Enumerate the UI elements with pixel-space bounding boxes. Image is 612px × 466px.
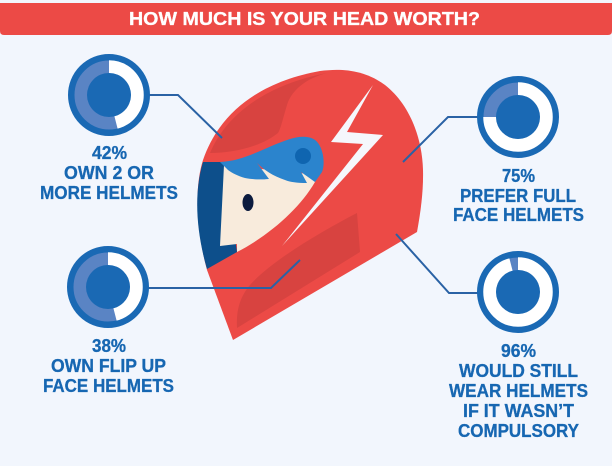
stat: 96% would still wear helmets: IF IT WASN’T [463, 401, 574, 421]
donut chart 96% [480, 254, 556, 330]
connector: bottom left [130, 260, 300, 288]
stat: 38% own flip up face helmets [43, 249, 174, 396]
ear button [295, 148, 311, 164]
connector: bottom right [396, 234, 478, 293]
stat: 75% prefer full face helmets: FACE HELMETS [453, 205, 584, 225]
stat: 42% own 2 or more helmets: OWN 2 OR [64, 163, 154, 183]
face [220, 165, 318, 252]
lightning bolt [282, 85, 383, 246]
stat: 42% own 2 or more helmets [40, 57, 178, 203]
stat: 38% own flip up face helmets: OWN FLIP UP [51, 356, 166, 376]
title banner [0, 3, 612, 35]
title banner: HOW MUCH IS YOUR HEAD WORTH? [129, 8, 480, 29]
hair [220, 137, 324, 183]
helmet illustration [197, 70, 423, 340]
connector: top left [131, 95, 222, 138]
eye [242, 194, 254, 211]
upper helmet shade [210, 73, 327, 153]
stat: 96% would still wear helmets: WOULD STILL [459, 361, 578, 381]
stat: 96% would still wear helmets [449, 254, 588, 441]
stat: 42% own 2 or more helmets: MORE HELMETS [40, 183, 178, 203]
helmet shell [197, 70, 423, 340]
stat: 96% would still wear helmets: 96% [501, 341, 536, 361]
stat: 96% would still wear helmets: COMPULSORY [458, 421, 579, 441]
stat: 38% own flip up face helmets: FACE HELMETS [43, 376, 174, 396]
stat: 42% own 2 or more helmets: 42% [92, 143, 127, 163]
stat: 75% prefer full face helmets: 75% [502, 166, 535, 186]
stat: 38% own flip up face helmets: 38% [92, 336, 126, 356]
lower helmet shade [237, 213, 360, 328]
donut chart 75% [480, 79, 556, 155]
stat: 75% prefer full face helmets: PREFER FULL [460, 186, 576, 206]
stat: 96% would still wear helmets: WEAR HELMETS [449, 381, 588, 401]
connector: top right [403, 117, 478, 162]
stat: 75% prefer full face helmets [453, 79, 584, 225]
donut chart 42% [71, 57, 147, 133]
donut chart 38% [70, 249, 146, 325]
visor interior [197, 162, 237, 269]
